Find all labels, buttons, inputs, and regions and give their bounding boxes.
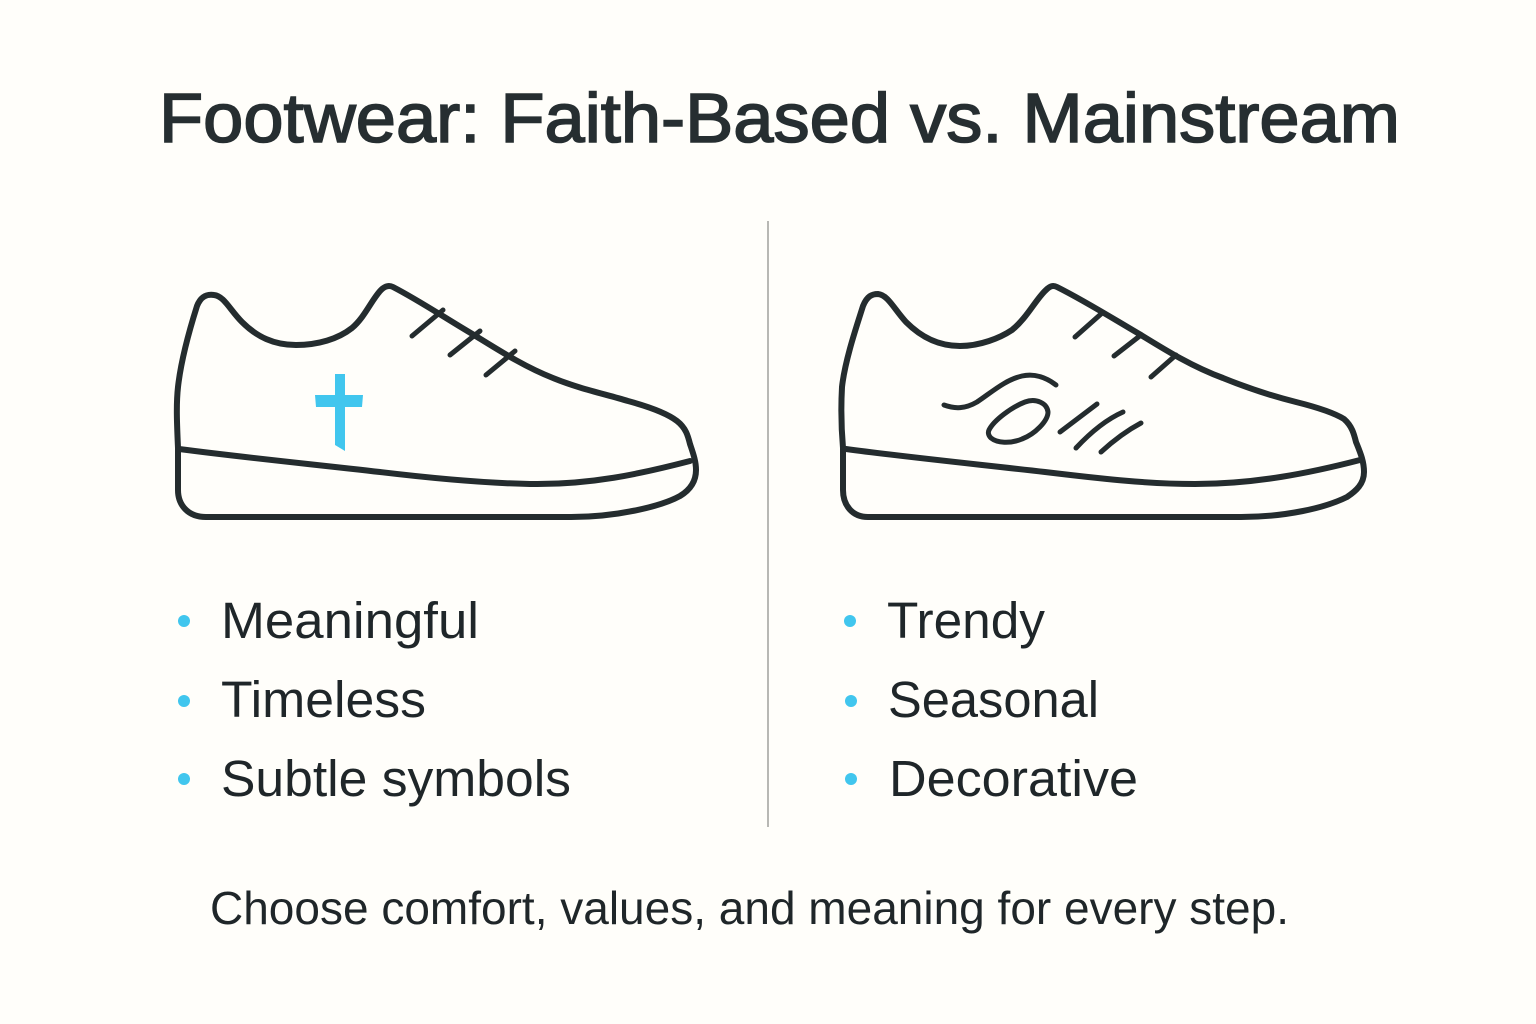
panel: faith-based shoe (177, 286, 696, 517)
bullet (845, 773, 857, 785)
title: Footwear: Faith-Based vs. Mainstream (159, 79, 1400, 157)
shoe outline (841, 286, 1364, 517)
bullet (178, 615, 190, 627)
bullet (844, 615, 856, 627)
bullet (845, 695, 857, 707)
laces (412, 310, 515, 375)
bullet (178, 695, 190, 707)
item: Decorative: Decorative (889, 750, 1138, 807)
decorative swoosh graphic (944, 375, 1141, 452)
item: Seasonal: Seasonal (888, 671, 1099, 728)
list: mainstream qualities (844, 592, 1138, 807)
list: faith-based qualities (178, 592, 571, 807)
item: Subtle symbols: Subtle symbols (221, 750, 571, 807)
midsole line (846, 449, 1360, 484)
bullet (178, 773, 190, 785)
midsole line (179, 449, 690, 484)
item: Trendy: Trendy (887, 592, 1045, 649)
item: Timeless: Timeless (221, 671, 426, 728)
item: Meaningful: Meaningful (221, 592, 479, 649)
panel: mainstream shoe (841, 286, 1364, 517)
center divider (767, 221, 769, 827)
icon: cross (315, 374, 363, 451)
tagline: Choose comfort, values, and meaning for every step. (210, 882, 1289, 934)
shoe outline (177, 286, 696, 517)
laces (1075, 314, 1176, 377)
